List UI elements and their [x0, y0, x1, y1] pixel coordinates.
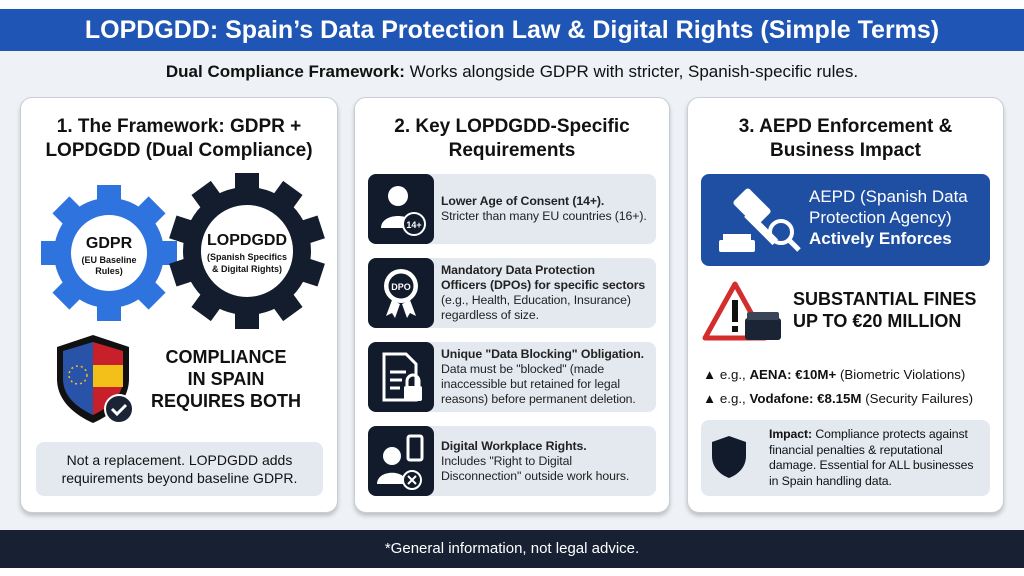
footer: [0, 530, 1024, 568]
item: DPO: Officers (DPOs) for specific sectors: [441, 278, 645, 292]
item: data blocking: reasons) before permanent deletion.: [441, 392, 636, 406]
icon: gears: (EU Baseline: [81, 255, 137, 265]
item: data blocking: inaccessible but retained for legal: [441, 377, 620, 391]
impact box: damage. Essential for ALL businesses: [769, 458, 973, 472]
icon: gears: Rules): [95, 266, 123, 276]
panel: enforcement: [687, 97, 1004, 513]
heading: [394, 116, 630, 161]
AEPD banner: Actively Enforces: [809, 229, 952, 248]
icon: gears: (Spanish Specifics: [207, 252, 287, 262]
item: data blocking: Unique "Data Blocking" Obligation.: [441, 347, 644, 361]
heading: 1. The Framework: GDPR +: [57, 116, 301, 137]
icon: gears: [41, 173, 325, 329]
text: requires both: REQUIRES BOTH: [151, 391, 301, 411]
heading: [45, 116, 313, 161]
item: age of consent: Stricter than many EU countries (16+).: [441, 209, 647, 223]
text: requires both: IN SPAIN: [188, 369, 264, 389]
fines warning: SUBSTANTIAL FINES: [793, 289, 976, 309]
text: requires both: COMPLIANCE: [166, 347, 286, 367]
title bar: LOPDGDD: Spain’s Data Protection Law & Digital Rights (Simple Terms): [85, 16, 939, 44]
note box: Not a replacement. LOPDGDD adds: [67, 452, 292, 468]
text: requires both: [151, 347, 301, 411]
title bar: [0, 9, 1024, 51]
fines warning: UP TO €20 MILLION: [793, 311, 961, 331]
item: DPO: (e.g., Health, Education, Insurance): [441, 293, 631, 307]
AEPD banner: [701, 174, 990, 266]
item: workplace rights: [368, 426, 656, 496]
item: workplace rights: Disconnection" outside work hours.: [441, 468, 629, 482]
examples: ▲ e.g., Vodafone: €8.15M (Security Failures): [703, 391, 973, 406]
heading: 3. AEPD Enforcement &: [739, 116, 952, 137]
impact box: financial penalties & reputational: [769, 442, 943, 456]
panel: framework: [20, 97, 338, 513]
heading: LOPDGDD (Dual Compliance): [45, 140, 313, 161]
item: data blocking: [368, 342, 656, 412]
impact box: Impact: Compliance protects against: [769, 427, 968, 441]
item: DPO: [368, 258, 656, 328]
heading: Requirements: [449, 140, 575, 161]
item: DPO: regardless of size.: [441, 308, 539, 322]
subtitle: Dual Compliance Framework: Works alongside GDPR with stricter, Spanish-specific rules.: [166, 62, 858, 81]
icon: shield EU/Spain: [57, 335, 132, 423]
note box: [36, 442, 323, 496]
heading: Business Impact: [770, 140, 921, 161]
fines warning: [702, 282, 976, 340]
item: age of consent: [368, 174, 656, 244]
item: workplace rights: Includes "Right to Digital: [441, 454, 572, 468]
item: DPO: Mandatory Data Protection: [441, 263, 595, 277]
AEPD banner: AEPD (Spanish Data: [809, 187, 968, 206]
item: DPO: DPO: [391, 282, 411, 292]
icon: gears: GDPR: [86, 235, 133, 252]
AEPD banner: Protection Agency): [809, 208, 952, 227]
examples: ▲ e.g., AENA: €10M+ (Biometric Violations): [703, 367, 965, 382]
heading: 2. Key LOPDGDD-Specific: [394, 116, 630, 137]
icon: gears: & Digital Rights): [212, 264, 282, 274]
panel: requirements: [354, 97, 670, 513]
impact box: in Spain handling data.: [769, 474, 892, 488]
examples: [703, 367, 973, 406]
item: age of consent: 14+: [406, 220, 422, 230]
item: data blocking: Data must be "blocked" (made: [441, 362, 604, 376]
icon: gears: LOPDGDD: [207, 232, 287, 249]
icon: gavel: [719, 188, 801, 252]
footer: *General information, not legal advice.: [385, 540, 639, 557]
impact box: [701, 420, 990, 496]
note box: requirements beyond baseline GDPR.: [62, 470, 297, 486]
item: workplace rights: Digital Workplace Rights.: [441, 438, 587, 452]
item: age of consent: Lower Age of Consent (14+).: [441, 194, 604, 208]
heading: [739, 116, 952, 161]
